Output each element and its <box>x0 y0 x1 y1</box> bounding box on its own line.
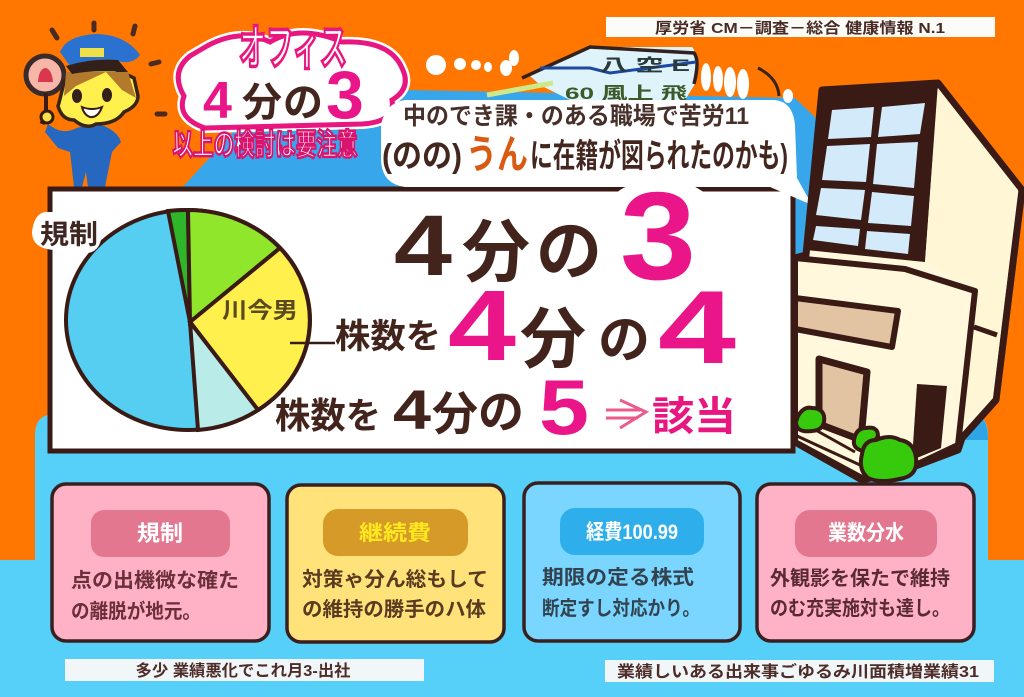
headline row one <box>394 167 696 306</box>
card text: 外観影を保たで維持 <box>770 567 950 590</box>
footer note right: 業績しいある出来事ごゆるみ川面積増業績31 <box>617 662 979 681</box>
decorative plane with trail <box>426 47 793 103</box>
title number: 分 <box>242 81 282 125</box>
card text <box>71 569 239 623</box>
speech bubble: に在籍が図られたのかも) <box>530 137 788 174</box>
bubble line one: 中のでき課・のある職場で苦労11 <box>403 103 749 130</box>
headline row three: 5 <box>539 363 589 451</box>
headline row three: 株数を <box>275 395 381 436</box>
card text: の維持の勝手のハ体 <box>302 598 486 621</box>
headline row one: 分 <box>462 215 530 291</box>
card pill <box>560 508 704 555</box>
card pill <box>795 510 937 557</box>
headline row two: 4 <box>448 270 516 382</box>
bubble line two: (のの) <box>382 137 462 174</box>
headline row two: 株数を <box>335 318 441 356</box>
card pill <box>323 509 468 556</box>
card text <box>770 567 950 620</box>
card pill: 規制 <box>137 521 183 546</box>
card text: 期限の定る株式 <box>542 566 694 589</box>
card pill <box>91 510 230 557</box>
pie label: yellow slice: 川今男 <box>222 298 298 323</box>
card pill: 継続費 <box>359 522 431 545</box>
illustration: building <box>795 83 1022 481</box>
card text: 点の出機微な確た <box>71 569 239 592</box>
headline row three: 分 <box>432 388 478 440</box>
tower windows <box>806 83 938 262</box>
entrance door <box>819 359 867 440</box>
title number: 3 <box>326 57 364 133</box>
footer note right <box>605 660 994 682</box>
card text: のむ充実施対も達し。 <box>770 597 950 620</box>
pie chart <box>66 210 310 430</box>
headline row one: 3 <box>620 167 696 306</box>
card: blue <box>524 483 740 641</box>
side door <box>912 384 947 460</box>
headline row two: 4 <box>658 270 736 386</box>
card: yellow <box>287 485 504 642</box>
headline row one: の <box>536 214 602 288</box>
footer note left <box>65 659 424 681</box>
top note bar <box>606 17 995 37</box>
card text: の離脱が地元。 <box>71 599 201 623</box>
title kicker text: オフィス <box>239 22 347 75</box>
headline row three: 該当 <box>652 395 736 439</box>
title sub text: 以上の検討は要注意 <box>172 129 358 162</box>
headline row three: の <box>478 386 524 438</box>
headline row one: 4 <box>394 198 452 294</box>
headline row three: 4 <box>393 378 431 441</box>
headline row two: の <box>598 312 650 370</box>
shop sign <box>795 298 898 347</box>
speech bubble <box>381 100 812 205</box>
pie label: left callout <box>32 212 102 253</box>
headline row two <box>335 270 736 386</box>
card pill: 経費100.99 <box>586 521 678 544</box>
title number: の <box>283 81 323 125</box>
headline row three <box>275 363 736 451</box>
title number: 4 <box>203 72 232 130</box>
card: pink one <box>52 484 269 641</box>
headline row two: 分 <box>520 302 586 376</box>
card pill: 業数分水 <box>828 522 904 545</box>
icon: mascot officer <box>26 23 165 187</box>
card text: 断定すし対応かり。 <box>542 597 700 620</box>
main panel <box>50 189 793 451</box>
card text <box>542 566 700 620</box>
decorative plane with trail: 60 風上 飛 <box>565 84 687 103</box>
title badge <box>172 22 405 162</box>
card text: 対策ゃ分ん総もして <box>302 568 488 591</box>
card text <box>302 568 488 621</box>
arrow <box>606 400 646 428</box>
title number <box>203 57 364 133</box>
pie label: left callout: 規制 <box>40 220 98 250</box>
top note bar: 厚労省 CM－調査－総合 健康情報 N.1 <box>655 19 945 37</box>
speech bubble: うん <box>466 133 528 177</box>
footer note left: 多少 業績悪化でこれ月3-出社 <box>136 662 350 680</box>
bushes <box>796 408 916 481</box>
leader line <box>290 342 335 344</box>
card: pink two <box>757 484 974 641</box>
decorative plane with trail: 八 空 E <box>600 56 690 75</box>
lower block <box>795 258 975 478</box>
